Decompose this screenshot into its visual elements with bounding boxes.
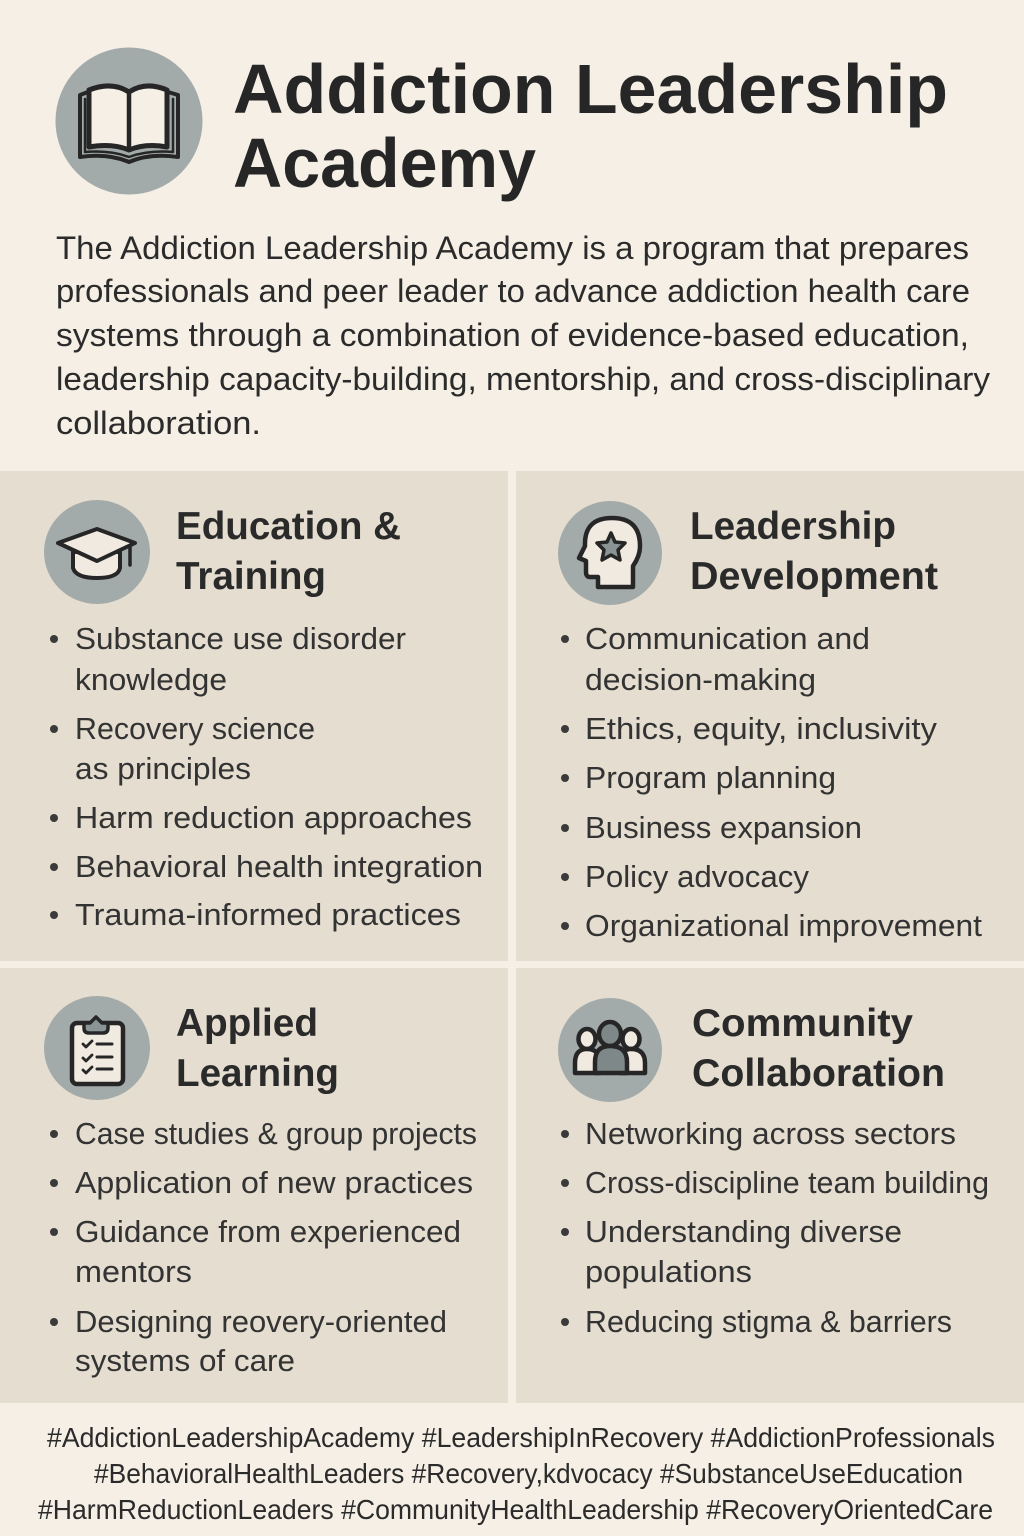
heading: leadership development <box>690 505 938 598</box>
bullet list: applied learning topics: Designing reovery-oriented <box>75 1304 447 1339</box>
intro paragraph: systems through a combination of evidence-based education, <box>56 317 969 353</box>
bullet list: leadership topics: Business expansion <box>585 810 862 845</box>
footer hashtags <box>38 1422 995 1525</box>
bullet list: leadership topics: Ethics, equity, inclusivity <box>585 711 938 746</box>
icon: group of people <box>558 998 662 1102</box>
heading: education and training <box>176 505 401 598</box>
footer hashtags: #BehavioralHealthLeaders #Recovery,kdvocacy #SubstanceUseEducation <box>94 1458 963 1489</box>
bullet list: education topics: Harm reduction approaches <box>75 800 472 835</box>
panel: leadership development <box>516 471 1024 961</box>
title: Addiction Leadership <box>233 50 948 128</box>
heading: community collaboration: Collaboration <box>692 1052 945 1095</box>
bullet list: leadership topics: Communication and <box>585 621 870 656</box>
heading: community collaboration <box>692 1002 945 1095</box>
header icon: open book <box>56 48 202 194</box>
title: Academy <box>233 124 536 202</box>
bullet list: leadership topics: Policy advocacy <box>585 859 809 894</box>
bullet list: leadership topics: Organizational improvement <box>585 908 982 943</box>
bullet list: applied learning topics: Guidance from experienced <box>75 1214 461 1249</box>
bullet list: education topics: Substance use disorder <box>75 621 406 656</box>
bullet list: applied learning topics: Case studies & group projects <box>75 1116 477 1151</box>
panel: applied learning <box>0 968 508 1403</box>
icon: graduation cap <box>44 500 150 604</box>
bullet list: education topics: Behavioral health integration <box>75 849 483 884</box>
heading: community collaboration: Community <box>692 1002 913 1045</box>
heading: leadership development: Development <box>690 555 938 598</box>
footer hashtags: #AddictionLeadershipAcademy #LeadershipInRecovery #AddictionProfessionals <box>47 1422 995 1453</box>
footer hashtags: #HarmReductionLeaders #CommunityHealthLeadership #RecoveryOrientedCare <box>38 1494 993 1525</box>
heading: applied learning: Applied <box>176 1002 318 1045</box>
bullet list: education topics: Trauma-informed practices <box>75 897 461 932</box>
intro paragraph: leadership capacity-building, mentorship, and cross-disciplinary <box>56 361 991 397</box>
bullet list: applied learning topics: Application of new practices <box>75 1165 473 1200</box>
panel: education and training <box>0 471 508 961</box>
bullet list: community topics: Networking across sectors <box>585 1116 956 1151</box>
intro paragraph: The Addiction Leadership Academy is a program that prepares <box>56 230 969 266</box>
bullet list: community topics: Cross-discipline team building <box>585 1165 989 1200</box>
intro paragraph <box>56 230 991 441</box>
bullet list: education topics: Recovery science <box>75 711 315 746</box>
bullet list: applied learning topics: mentors <box>75 1254 192 1289</box>
panel: community collaboration <box>516 968 1024 1403</box>
icon: head with star <box>558 501 662 605</box>
heading: applied learning <box>176 1002 339 1095</box>
bullet list: applied learning topics <box>50 1116 477 1378</box>
heading: education and training: Education & <box>176 505 401 548</box>
bullet list: education topics <box>50 621 483 932</box>
bullet list: education topics: knowledge <box>75 662 227 697</box>
intro paragraph: professionals and peer leader to advance addiction health care <box>56 273 970 309</box>
icon: clipboard checklist <box>44 996 150 1100</box>
bullet list: applied learning topics: systems of care <box>75 1343 295 1378</box>
bullet list: education topics: as principles <box>75 751 251 786</box>
bullet list: leadership topics: Program planning <box>585 760 836 795</box>
heading: leadership development: Leadership <box>690 505 896 548</box>
heading: education and training: Training <box>176 555 326 598</box>
bullet list: leadership topics: decision-making <box>585 662 816 697</box>
bullet list: community topics: Understanding diverse <box>585 1214 902 1249</box>
bullet list: community topics: Reducing stigma & barriers <box>585 1304 952 1339</box>
bullet list: leadership topics <box>561 621 982 943</box>
title <box>233 50 948 202</box>
intro paragraph: collaboration. <box>56 405 261 441</box>
heading: applied learning: Learning <box>176 1052 339 1095</box>
bullet list: community topics: populations <box>585 1254 752 1289</box>
bullet list: community topics <box>561 1116 989 1339</box>
